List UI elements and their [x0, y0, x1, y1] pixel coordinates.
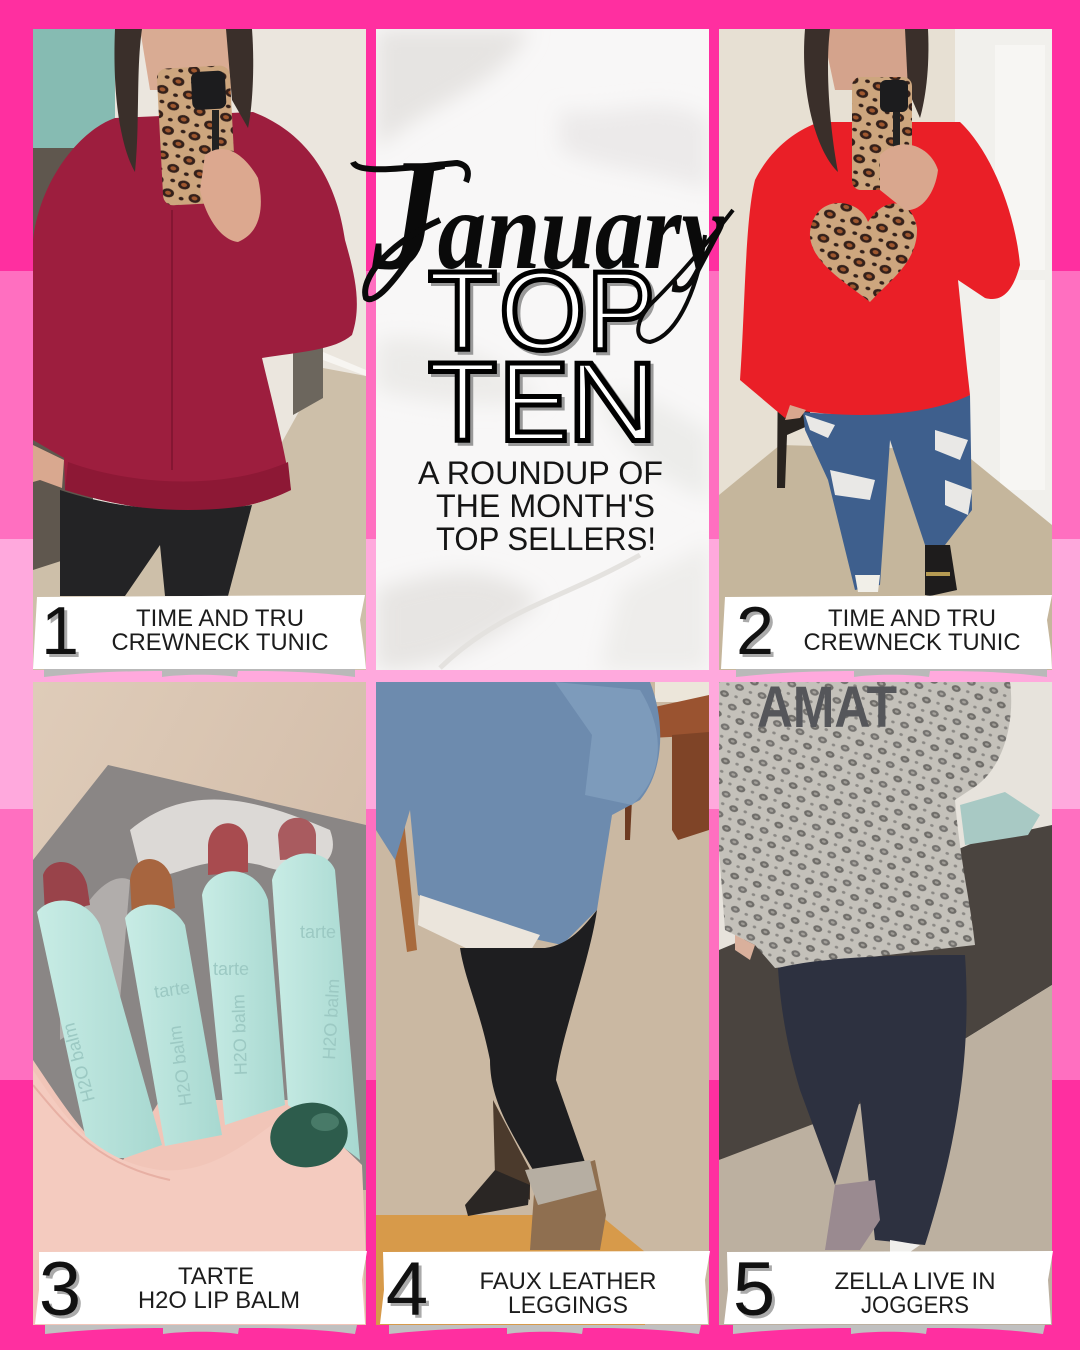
heading shadow: N [570, 342, 661, 468]
balm 4: H2O balm [319, 978, 343, 1060]
balm 2 [125, 859, 222, 1146]
caption card [33, 595, 366, 669]
balm 2: tarte [153, 977, 191, 1002]
caption text [138, 1263, 300, 1314]
heading lettering: P [587, 248, 655, 374]
caption: item 4 [380, 1247, 710, 1335]
balm 3: H2O balm [228, 994, 251, 1076]
text: subheading: TOP SELLERS! [436, 521, 656, 557]
number 4: 4 [389, 1250, 431, 1335]
caption text: CREWNECK TUNIC [804, 629, 1020, 656]
balm 3 [202, 823, 285, 1125]
caption: item 5 [724, 1247, 1053, 1335]
caption: item 1 [33, 593, 366, 677]
heading lettering [428, 248, 658, 464]
panel: item 5 photo [719, 675, 1052, 1325]
caption text [804, 605, 1020, 656]
caption card [35, 1251, 367, 1324]
number 5: 5 [733, 1247, 775, 1332]
heading lettering: T [428, 248, 497, 374]
heading: TOP TEN [428, 248, 661, 468]
caption card [380, 1251, 710, 1324]
caption text: ZELLA LIVE IN [834, 1268, 996, 1295]
number 3: 3 [39, 1247, 81, 1332]
panel: item 1 photo [33, 29, 366, 670]
panel: centre marble background [376, 29, 709, 670]
balm 3: tarte [213, 959, 249, 979]
caption card [721, 595, 1052, 669]
caption text: H2O LIP BALM [138, 1287, 300, 1314]
number 1: 1 [44, 596, 82, 672]
heading shadow: T [431, 252, 500, 376]
heading shadow: T [431, 342, 500, 468]
text: subheading: A ROUNDUP OF [418, 455, 663, 491]
caption shadow [44, 669, 355, 677]
text: subheading [418, 455, 663, 557]
number 3: 3 [42, 1250, 84, 1335]
caption text: LEGGINGS [508, 1292, 628, 1319]
heading: January script [353, 126, 733, 342]
caption: item 2 [721, 593, 1052, 677]
caption text: TIME AND TRU [136, 605, 304, 632]
panel: item 4 photo [376, 682, 709, 1325]
caption text [834, 1268, 996, 1319]
number 2: 2 [739, 596, 777, 672]
heading lettering: N [567, 340, 658, 464]
caption shadow [389, 1325, 701, 1334]
heading lettering: O [499, 248, 586, 374]
number 2: 2 [736, 593, 774, 669]
caption text [480, 1268, 656, 1319]
caption card [724, 1251, 1053, 1324]
balm 2: H2O balm [165, 1024, 196, 1107]
caption shadow [733, 1325, 1045, 1334]
caption text: JOGGERS [861, 1292, 969, 1319]
number 1: 1 [41, 593, 79, 669]
heading: January script: anuary [438, 168, 725, 293]
heading: January script: J [371, 126, 446, 303]
caption text [112, 605, 328, 656]
heading shadow: P [590, 252, 658, 376]
caption shadow [45, 1325, 357, 1334]
text: subheading: THE MONTH'S [436, 488, 655, 524]
panel: item 2 photo [719, 29, 1052, 670]
balm 4 [272, 818, 360, 1160]
caption text: TARTE [178, 1263, 254, 1290]
caption shadow [736, 669, 1047, 677]
number 5: 5 [736, 1250, 778, 1335]
heading lettering: E [499, 340, 569, 464]
caption: item 3 [35, 1247, 367, 1335]
heading shadow: O [502, 252, 589, 376]
balm 1: H2O balm [59, 1021, 99, 1104]
caption text: TIME AND TRU [828, 605, 996, 632]
number 4: 4 [386, 1247, 428, 1332]
panel: item 5 photo: AMAT [757, 675, 897, 740]
caption text: CREWNECK TUNIC [112, 629, 328, 656]
panel: item 3 photo [33, 682, 366, 1330]
heading shadow [431, 252, 661, 468]
caption text: FAUX LEATHER [480, 1268, 656, 1295]
heading shadow: E [502, 342, 572, 468]
balm 1 [37, 862, 162, 1158]
heading lettering: T [428, 340, 497, 464]
balm 4: tarte [300, 922, 336, 942]
